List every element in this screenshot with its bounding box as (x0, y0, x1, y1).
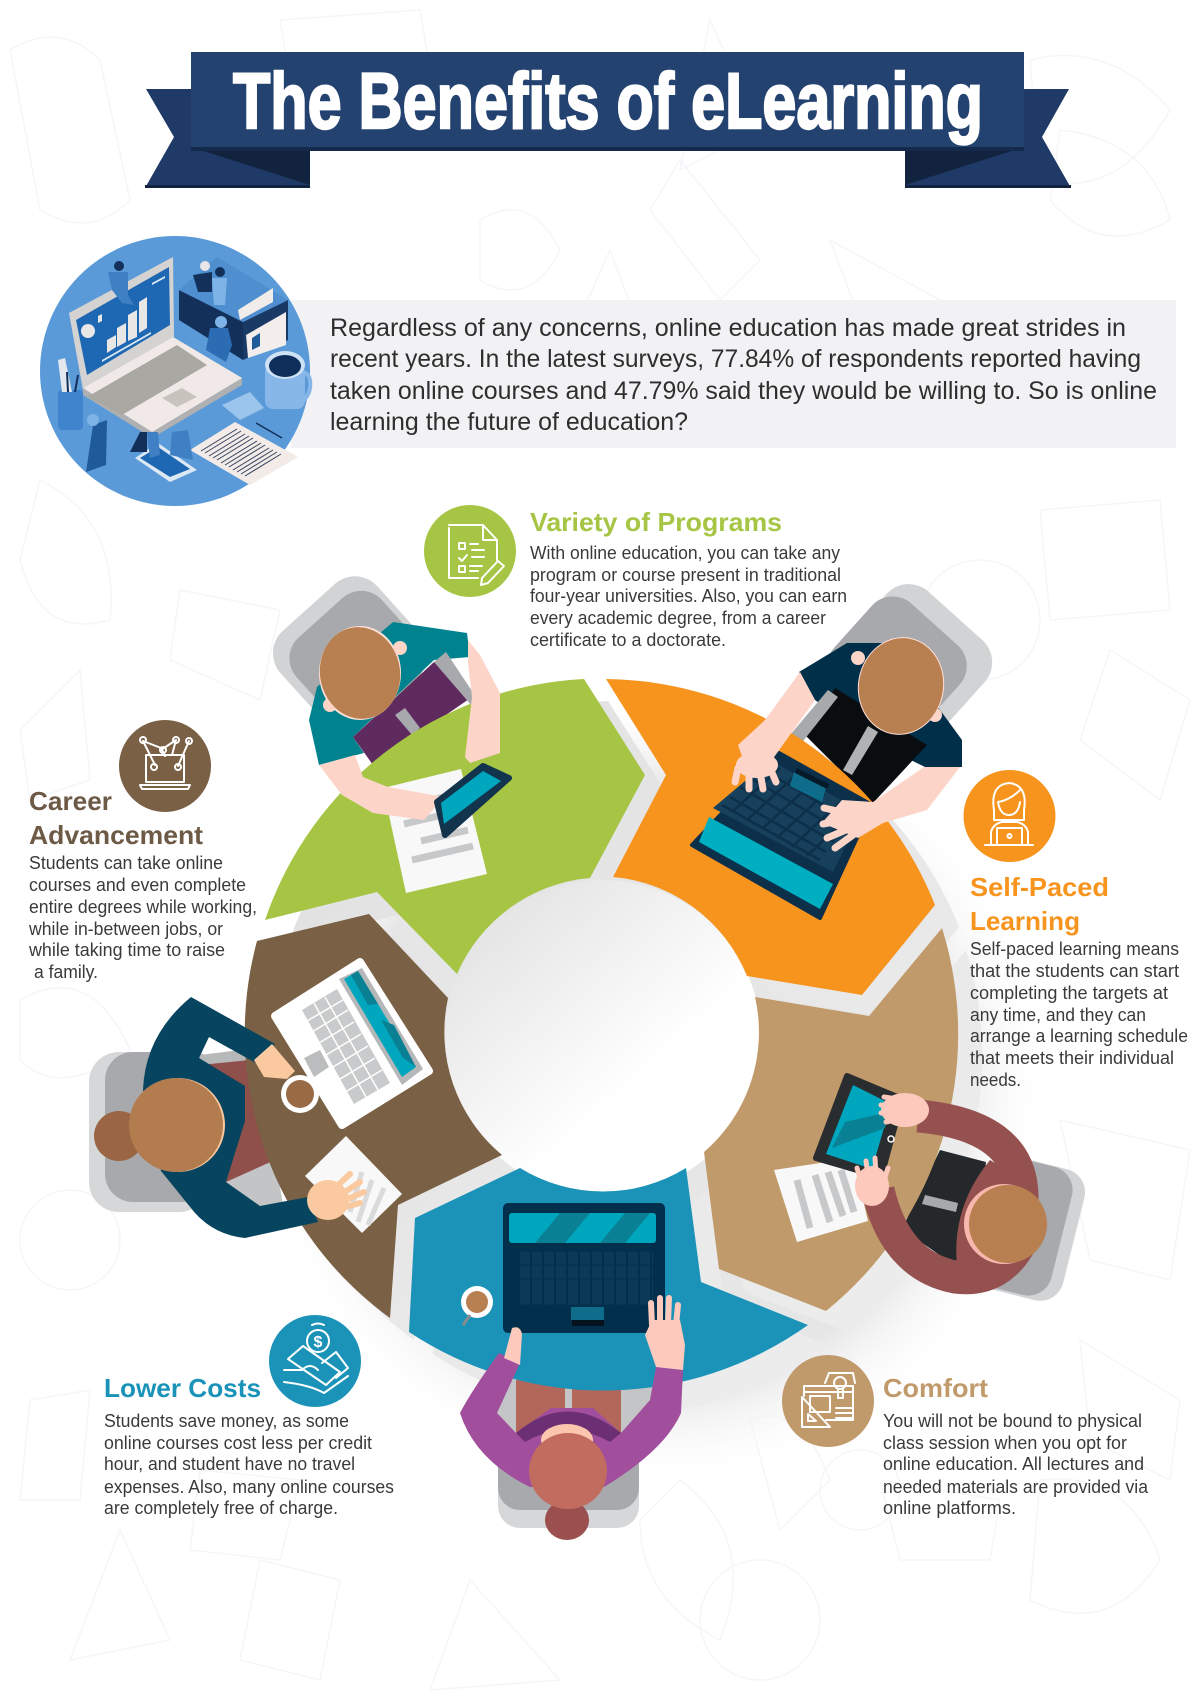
person 5 chair and torso (89, 1050, 290, 1215)
text: comfort: online platforms. (883, 1498, 1016, 1518)
donut segment: orange (606, 679, 935, 995)
centre hole (445, 880, 761, 1196)
heading: career advancement (29, 786, 203, 850)
pen holder (58, 390, 83, 430)
text: variety of programs: program or course present in traditional (530, 565, 841, 585)
text: variety of programs: every academic degree, from a career (530, 608, 826, 628)
text: career advancement: while taking time to raise (28, 940, 225, 960)
document (190, 422, 298, 485)
book (179, 290, 243, 360)
text: comfort: class session when you opt for (883, 1433, 1127, 1453)
text: self-paced learning: any time, and they can (970, 1005, 1146, 1025)
text: self-paced learning: Self-paced learning means (970, 939, 1179, 959)
icon: variety of programs checklist (424, 505, 516, 597)
person 3 chair and torso (902, 1150, 1090, 1306)
title ribbon (145, 52, 1071, 188)
sticky notes (222, 392, 264, 420)
ribbon centre band (191, 52, 1024, 147)
icon: comfort design tools (782, 1355, 874, 1447)
donut segment: brown (245, 914, 502, 1318)
text: lower costs: are completely free of charge. (104, 1498, 338, 1518)
intro panel background (291, 300, 1176, 448)
text: career advancement: Students can take online (29, 853, 223, 873)
text: self-paced learning: that meets their individual (970, 1048, 1174, 1068)
heading: self-paced learning: Learning (970, 906, 1080, 936)
intro text: taken online courses and 47.79% said they would be willing to. So is online (330, 377, 1157, 405)
text: career advancement: entire degrees while working, (29, 897, 257, 917)
intro text: recent years. In the latest surveys, 77.84% of respondents reported having (330, 345, 1141, 373)
ribbon left tail (145, 89, 310, 188)
phone with students (135, 443, 197, 482)
person 3 head, arms and tablet (774, 1076, 1047, 1278)
heading: career advancement: Advancement (29, 820, 203, 850)
text: comfort: online education. All lectures and (883, 1454, 1144, 1474)
tiny students (114, 261, 124, 271)
heading: self-paced learning (970, 872, 1109, 936)
person 2 head, arms and laptop (692, 630, 960, 918)
text: self-paced learning: completing the targets at (970, 983, 1168, 1003)
person 2 chair and torso (790, 572, 1005, 803)
text: self-paced learning (970, 939, 1188, 1090)
icon: career advancement laptop network (119, 720, 211, 812)
person 5 head, arms and laptop (94, 962, 429, 1238)
text: lower costs (104, 1411, 394, 1518)
heading: variety of programs: Variety of Programs (530, 507, 782, 537)
intro text: Regardless of any concerns, online education has made great strides in (330, 314, 1126, 342)
text: career advancement: courses and even complete (29, 875, 246, 895)
text: comfort: needed materials are provided via (883, 1477, 1149, 1497)
person 4 chair and torso (495, 1375, 652, 1528)
text: lower costs: Students save money, as some (104, 1411, 349, 1431)
text: lower costs: expenses. Also, many online courses (104, 1477, 394, 1497)
person 1 chair and torso (261, 564, 478, 765)
text: career advancement: a family. (34, 962, 98, 982)
text: career advancement (28, 853, 257, 982)
heading: self-paced learning: Self-Paced (970, 872, 1109, 902)
text: self-paced learning: that the students can start (970, 961, 1179, 981)
icon: lower costs money in hand: $ (314, 1334, 323, 1351)
text: lower costs: online courses cost less per credit (104, 1433, 372, 1453)
intro illustration: laptop and students (40, 236, 310, 506)
text: comfort: You will not be bound to physical (883, 1411, 1142, 1431)
intro text (330, 314, 1157, 436)
heading: lower costs: Lower Costs (104, 1373, 261, 1403)
donut segment: tan (704, 928, 958, 1311)
intro text: learning the future of education? (330, 408, 688, 436)
person 1 head, arms and tablet (313, 621, 509, 893)
donut segment: blue (409, 1168, 808, 1391)
heading: comfort: Comfort (883, 1373, 988, 1403)
text: variety of programs: four-year universities. Also, you can earn (530, 586, 847, 606)
text: comfort (883, 1411, 1149, 1518)
soft table shadow (250, 690, 1050, 1490)
mug (298, 372, 310, 402)
text: variety of programs (530, 543, 847, 650)
icon: self-paced woman at laptop (964, 770, 1056, 862)
person 4 head, arms and laptop (460, 1203, 685, 1540)
ribbon right tail (905, 89, 1071, 188)
title text: The Benefits of eLearning (233, 56, 983, 145)
text: variety of programs: certificate to a doctorate. (530, 630, 726, 650)
text: self-paced learning: arrange a learning schedule (970, 1026, 1188, 1046)
text: career advancement: while in-between jobs, or (28, 919, 223, 939)
icon: lower costs money in hand (269, 1315, 361, 1407)
donut segment: green (265, 679, 645, 974)
text: lower costs: hour, and student have no travel (104, 1454, 355, 1474)
segment shadows (269, 701, 982, 1413)
text: variety of programs: With online education, you can take any (530, 543, 840, 563)
heading: career advancement: Career (29, 786, 112, 816)
text: self-paced learning: needs. (970, 1070, 1021, 1090)
